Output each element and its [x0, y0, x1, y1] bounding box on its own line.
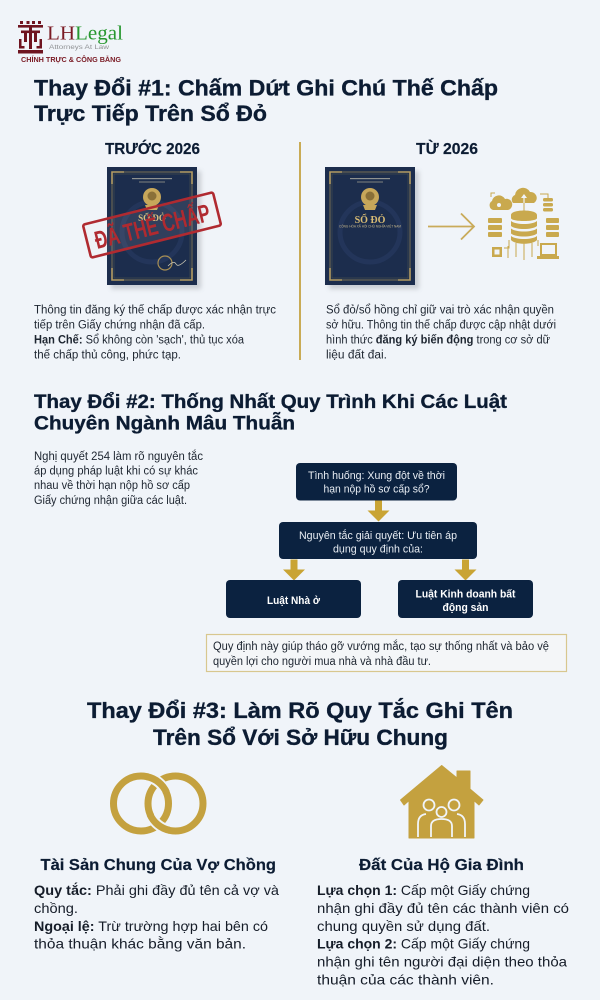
logo tagline: Attorneys At Law — [49, 44, 109, 51]
text: resolution 254: áp dụng pháp luật khi có sự khác — [34, 466, 198, 478]
box: housing law: Luật Nhà ở — [267, 595, 320, 607]
logo wordmark: LHLegal — [47, 22, 123, 44]
heading: change 2: Thay Đổi #2: Thống Nhất Quy Trình Khi Các Luật — [34, 391, 508, 413]
text: marital rules: thỏa thuận khác bằng văn bản. — [34, 936, 246, 952]
box: principle: Nguyên tắc giải quyết: Ưu tiên áp — [299, 529, 457, 542]
text: before description: tiếp trên Giấy chứng nhận đã cấp. — [34, 320, 205, 332]
panel: household land — [317, 766, 569, 988]
text: before description — [34, 304, 276, 362]
text: household options: chung quyền sử dụng đất. — [317, 918, 490, 934]
box: principle: dụng quy định của: — [333, 544, 423, 556]
box: situation — [296, 463, 457, 500]
text: before description: Thông tin đăng ký thế chấp được xác nhận trực — [34, 304, 276, 316]
text: resolution 254 — [34, 450, 203, 507]
stamp: mortgaged: ĐÃ THẾ CHẤP — [91, 197, 213, 255]
panel: before 2026 — [34, 140, 276, 362]
text: before description: thế chấp thủ công, phức tạp. — [34, 350, 181, 362]
text: resolution 254: nhau về thời hạn nộp hồ sơ cấp — [34, 480, 190, 492]
callout: benefit: quyền lợi cho người mua nhà và nhà đầu tư. — [213, 656, 431, 668]
text: resolution 254: Giấy chứng nhận giữa các luật. — [34, 495, 187, 507]
arrow: to database — [428, 214, 474, 240]
heading: change 2 — [34, 391, 508, 434]
text: household options: nhận ghi đầy đủ tên các thành viên có — [317, 900, 569, 916]
box: situation: Tình huống: Xung đột về thời — [308, 470, 445, 482]
icon: logo mark — [18, 21, 43, 54]
text: from description — [326, 304, 556, 362]
text: from description: hình thức đăng ký biến động trong cơ sở dữ — [326, 334, 550, 346]
subheading: marital property: Tài Sản Chung Của Vợ Chồng — [40, 857, 276, 874]
panel: from 2026 — [325, 140, 559, 362]
logo slogan: CHÍNH TRỰC & CÔNG BẰNG — [21, 55, 121, 64]
text: household options: nhận ghi tên người đại diện theo thỏa — [317, 954, 567, 970]
text: household options — [317, 882, 569, 988]
text: marital rules: chồng. — [34, 900, 78, 916]
heading: change 3 — [87, 698, 513, 750]
text: before description: Hạn Chế: Sổ không còn 'sạch', thủ tục xóa — [34, 334, 245, 346]
text: household options: Lựa chọn 1: Cấp một Giấy chứng — [317, 882, 530, 898]
heading: change 3: Trên Sổ Với Sở Hữu Chung — [153, 725, 448, 750]
subheading: household land: Đất Của Hộ Gia Đình — [359, 857, 524, 874]
arrow: down left — [283, 560, 305, 580]
subheading: from 2026: TỪ 2026 — [416, 140, 478, 158]
subheading: before 2026: TRƯỚC 2026 — [105, 140, 200, 158]
arrow: down right — [454, 560, 476, 580]
text: from description: liệu đất đai. — [326, 350, 387, 362]
box: real estate business law: động sản — [442, 602, 489, 614]
icon: family house — [400, 766, 483, 838]
panel: marital property — [34, 776, 279, 952]
icon: land database — [488, 188, 559, 260]
box: situation: hạn nộp hồ sơ cấp sổ? — [324, 484, 430, 496]
book: clean certificate — [325, 167, 419, 289]
text: from description: sở hữu. Thông tin thế chấp được cập nhật dưới — [326, 320, 556, 332]
book: red certificate with stamp — [83, 167, 221, 289]
box: real estate business law — [398, 580, 533, 618]
heading: change 3: Thay Đổi #3: Làm Rõ Quy Tắc Ghi Tên — [87, 698, 513, 723]
arrow: down — [368, 500, 390, 522]
book: red certificate with stamp: SỔ ĐỎ — [138, 213, 166, 223]
heading: change 2: Chuyên Ngành Mâu Thuẫn — [34, 410, 295, 434]
flowchart — [226, 463, 533, 618]
box: housing law — [226, 580, 361, 618]
text: from description: Sổ đỏ/sổ hồng chỉ giữ vai trò xác nhận quyền — [326, 304, 554, 316]
text: marital rules: Quy tắc: Phải ghi đầy đủ tên cả vợ và — [34, 881, 279, 898]
callout: benefit — [206, 634, 566, 672]
book: clean certificate: CỘNG HÒA XÃ HỘI CHỦ NGHĨA VIỆT NAM — [339, 224, 401, 228]
heading: change 1: Thay Đổi #1: Chấm Dứt Ghi Chú Thế Chấp — [34, 76, 498, 100]
box: principle — [279, 522, 477, 559]
text: household options: thuận của các thành viên. — [317, 972, 494, 988]
text: resolution 254: Nghị quyết 254 làm rõ nguyên tắc — [34, 450, 203, 463]
logo: LHLegal — [18, 21, 123, 64]
heading: change 1: Trực Tiếp Trên Sổ Đỏ — [34, 101, 267, 126]
book: clean certificate: SỔ ĐỎ — [355, 213, 386, 226]
callout: benefit: Quy định này giúp tháo gỡ vướng mắc, tạo sự thống nhất và bảo vệ — [213, 640, 549, 653]
heading: change 1 — [34, 76, 498, 126]
icon: wedding rings — [114, 776, 203, 831]
text: marital rules: Ngoại lệ: Trừ trường hợp hai bên có — [34, 918, 268, 934]
box: real estate business law: Luật Kinh doanh bất — [416, 588, 516, 600]
text: household options: Lựa chọn 2: Cấp một Giấy chứng — [317, 936, 530, 952]
text: marital rules — [34, 881, 279, 952]
